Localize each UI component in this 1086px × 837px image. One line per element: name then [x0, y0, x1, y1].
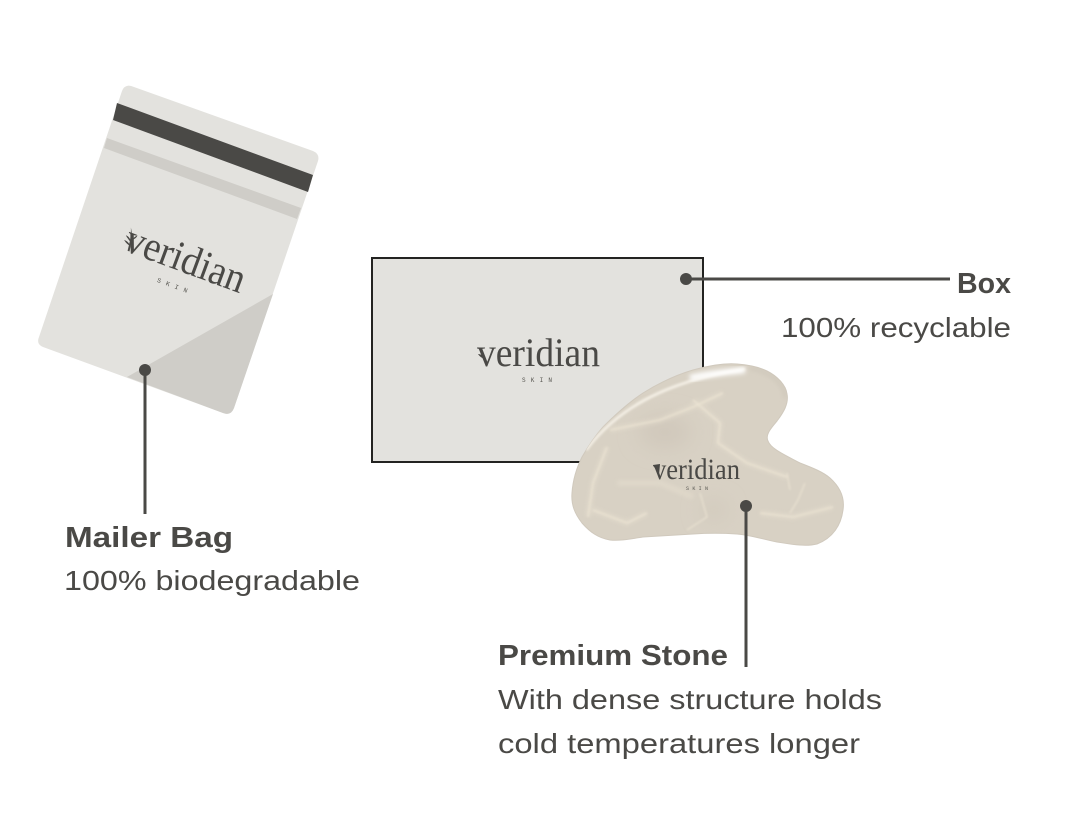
stone shading — [639, 416, 726, 519]
label: premium stone: Premium Stone — [498, 640, 728, 672]
bag dark stripe — [113, 103, 313, 192]
logo leaf — [121, 227, 139, 252]
box logo: veridian — [477, 330, 600, 375]
stone logo: veridian — [653, 453, 740, 486]
label: box — [781, 268, 1011, 343]
label: mailer bag: Mailer Bag — [65, 522, 233, 554]
illustration: gua sha stone — [572, 364, 843, 545]
label: premium stone — [498, 640, 882, 759]
label: mailer bag — [64, 522, 360, 596]
stone right shade — [750, 368, 785, 398]
bag light stripe — [104, 138, 301, 219]
label: mailer bag: 100% biodegradable — [64, 565, 360, 596]
box logo leaf — [478, 347, 487, 366]
label: premium stone: With dense structure holds — [498, 684, 882, 715]
bag corner fold — [127, 294, 273, 414]
callout: box connector — [680, 273, 950, 285]
box logo: SKIN — [522, 377, 552, 384]
bag logo: SKIN — [156, 277, 188, 295]
label: box: 100% recyclable — [781, 312, 1011, 343]
illustration: box — [372, 258, 703, 462]
stone highlight — [586, 369, 745, 450]
label: box: Box — [957, 268, 1011, 300]
bag logo: veridian — [119, 216, 252, 303]
stone logo: SKIN — [686, 486, 708, 492]
stone veins soft — [588, 393, 833, 523]
stone logo leaf — [653, 464, 660, 475]
stone veins — [692, 475, 804, 527]
callout: mailer bag connector — [139, 364, 151, 514]
bag body — [38, 86, 318, 414]
callout: stone connector — [740, 500, 752, 667]
stone body — [572, 364, 843, 545]
box body — [372, 258, 703, 462]
illustration: mailer bag — [38, 86, 318, 414]
label: premium stone: cold temperatures longer — [498, 728, 860, 759]
